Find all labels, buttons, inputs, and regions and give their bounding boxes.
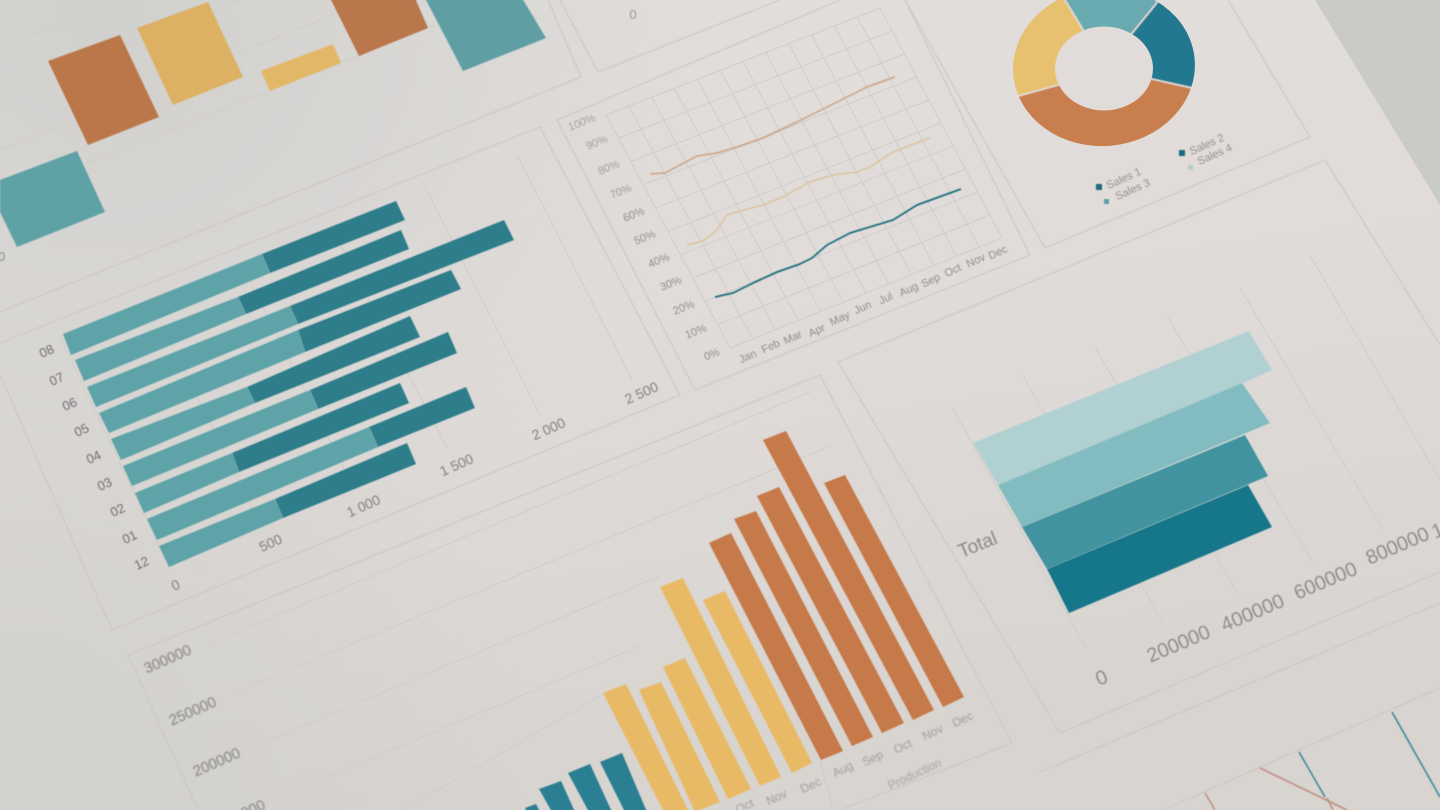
percent axis labels: 40% (647, 251, 672, 271)
month axis labels: Feb (760, 337, 782, 356)
gridlines (59, 155, 632, 568)
segment: yellow (1013, 0, 1083, 96)
month labels: Dec (798, 774, 823, 796)
column: orange top (330, 0, 428, 56)
category labels: 08 (37, 341, 56, 361)
value axis labels: 600000 (1291, 558, 1361, 605)
category labels: 01 (120, 527, 139, 547)
month axis labels (737, 243, 1010, 366)
columns: yellow (603, 578, 812, 810)
value axis labels: 2 000 (529, 414, 568, 443)
value axis labels: 0 (1092, 666, 1111, 691)
value axis labels: 250000 (166, 694, 219, 729)
value axis labels: 800000 (1363, 523, 1433, 570)
month axis labels: Jul (877, 291, 895, 307)
band: light (998, 383, 1270, 527)
value axis labels (169, 378, 661, 594)
percent axis labels: 0% (702, 346, 722, 363)
month axis labels: Dec (987, 243, 1010, 262)
grid (606, 8, 1002, 348)
columns: teal (525, 753, 647, 810)
value axis labels: 2 500 (622, 378, 661, 407)
percent axis labels: 80% (597, 158, 622, 178)
month labels: Oct (891, 736, 915, 757)
column: yellow (137, 2, 243, 105)
column: teal top (425, 0, 546, 71)
percent axis labels: 20% (672, 298, 697, 318)
month labels (733, 708, 975, 810)
band: medium (1022, 435, 1268, 569)
value axis labels: 400000 (1218, 590, 1288, 637)
grey vignette top left (0, 0, 800, 640)
line: teal steep (1392, 712, 1440, 797)
value axis labels (1092, 519, 1440, 691)
axis group label: Production (886, 756, 944, 793)
legend: Sales 4 (1196, 142, 1234, 168)
table surface bottom left (0, 640, 72, 810)
line: teal series (715, 189, 961, 297)
panel: top left column chart (0, 0, 546, 264)
category labels: 12 (132, 553, 151, 573)
month labels: Sep (860, 747, 886, 769)
month axis labels: Mar (782, 328, 804, 347)
grey vignette bottom left (0, 250, 560, 810)
columns: orange (709, 431, 964, 760)
panel: single stacked bar total (952, 255, 1440, 691)
value axis labels: 500 (257, 531, 285, 555)
category labels: 03 (95, 474, 114, 494)
line: teal short (1299, 752, 1325, 797)
band: lightest (973, 331, 1272, 485)
panel: line chart (567, 8, 1010, 366)
percent axis labels: 90% (585, 133, 610, 153)
table surface top right (1315, 0, 1440, 205)
donut hole (1055, 26, 1153, 110)
percent axis labels (567, 112, 722, 363)
gridlines (952, 255, 1440, 653)
column: teal left (0, 151, 105, 247)
category labels: 02 (108, 500, 127, 520)
month axis labels: Sep (920, 271, 942, 290)
donut ring (1013, 0, 1195, 146)
category labels (37, 341, 151, 573)
category label: Total (955, 528, 1000, 563)
panel: monthly column chart (141, 392, 975, 810)
value axis labels: 1 500 (437, 450, 476, 479)
percent axis labels: 30% (659, 274, 684, 294)
month labels: Nov (920, 721, 945, 743)
category labels: 07 (47, 369, 66, 389)
panel: stacked horizontal bar chart (37, 155, 661, 594)
month axis labels: May (828, 309, 852, 329)
line: yellow series (687, 138, 930, 245)
month axis labels: Apr (807, 322, 828, 340)
percent axis labels: 100% (567, 112, 597, 134)
gridlines (207, 392, 833, 810)
value axis labels: 200000 (1144, 621, 1214, 668)
month axis labels: Jun (852, 299, 874, 317)
category labels: 05 (72, 420, 91, 440)
band: dark (1047, 485, 1272, 613)
month axis labels: Nov (965, 251, 988, 270)
axis label: top centre zero: 0 (629, 7, 637, 22)
legend (1096, 132, 1234, 204)
month axis labels: Oct (943, 262, 963, 280)
legend: Sales 2 (1188, 132, 1226, 158)
gridlines (0, 0, 435, 163)
percent axis labels: 10% (684, 322, 709, 342)
segment: light teal (1065, 0, 1158, 34)
legend: Sales 1 (1105, 166, 1143, 192)
segment: orange (1018, 79, 1191, 146)
bars dark segment (232, 201, 514, 518)
percent axis labels: 60% (622, 205, 647, 225)
column: orange (48, 35, 159, 145)
month labels: Aug (830, 758, 855, 780)
month axis labels: Aug (898, 280, 920, 299)
month labels: Dec (950, 708, 975, 730)
value axis labels: 1 000 (344, 491, 383, 520)
legend: Sales 3 (1114, 177, 1152, 203)
category labels: 04 (84, 447, 103, 467)
value axis labels (141, 642, 268, 810)
value axis labels: 300000 (141, 642, 194, 677)
line: orange short (1205, 793, 1215, 810)
line: orange long (1260, 768, 1347, 810)
month axis labels: Jan (737, 348, 759, 366)
percent axis labels: 70% (609, 182, 634, 202)
value axis labels: 200000 (190, 745, 243, 780)
value axis labels: 0 (169, 576, 182, 594)
bars light segment (63, 254, 378, 567)
segment: dark teal (1132, 2, 1195, 89)
percent axis labels: 50% (633, 228, 658, 248)
panel: donut chart (1000, 0, 1234, 204)
month labels: Nov (764, 786, 789, 808)
column: small yellow (261, 44, 341, 91)
line: orange series (650, 77, 895, 174)
line: orange crossing (1327, 798, 1333, 810)
panel: partial line chart bottom right (1205, 712, 1440, 810)
category labels: 06 (60, 394, 79, 414)
